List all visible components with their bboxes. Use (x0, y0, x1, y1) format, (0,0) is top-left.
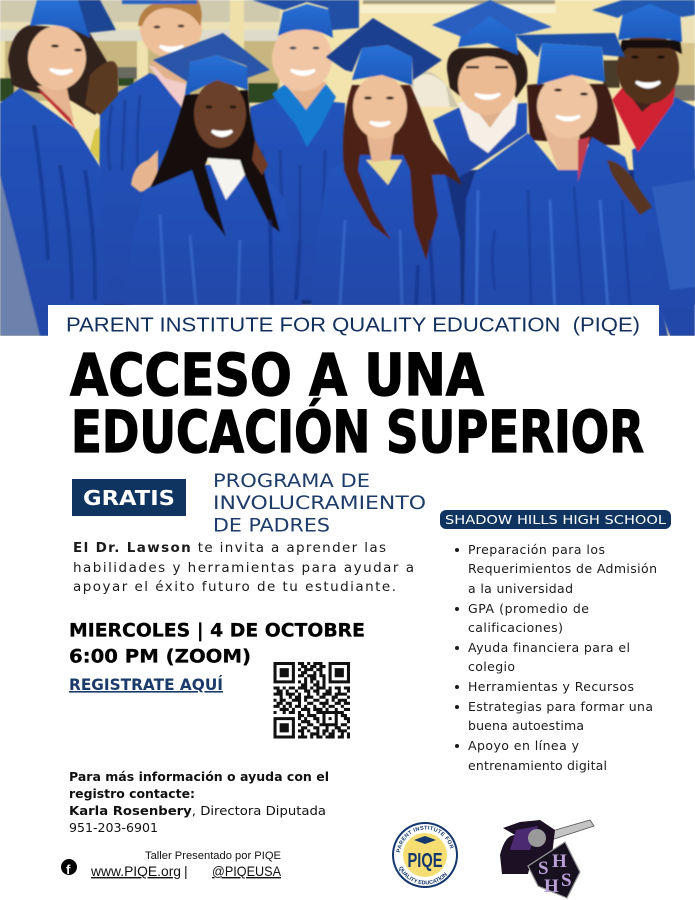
subtitle: programa: INVOLUCRAMIENTO (213, 492, 426, 514)
website and social handle (90, 863, 282, 879)
logo: PIQE: PIQE (408, 850, 442, 872)
workshop topics list: calificaciones) (468, 620, 563, 635)
front: girl with black hair (124, 33, 302, 305)
workshop topics list: entrenamiento digital (468, 758, 607, 773)
logo: PIQE: QUALITY EDUCATION (399, 866, 448, 884)
photo: graduating students in blue gowns (0, 0, 695, 336)
logo: Shadow Hills knight: S (561, 870, 572, 891)
website and social handle: | (184, 863, 188, 879)
contact information: Karla Rosenbery , Directora Diputada (69, 803, 326, 818)
logo: Shadow Hills knight: H (552, 851, 567, 872)
workshop topics list: a la universidad (468, 581, 573, 596)
registration link: REGISTRATE AQUÍ (69, 675, 223, 694)
back row: boy with pink shirt (98, 0, 202, 305)
badge: gratis: GRATIS (83, 486, 175, 510)
banner: organisation name: PARENT INSTITUTE FOR QUALITY EDUCATION (PIQE) (66, 314, 640, 336)
building backdrop (0, 0, 695, 336)
logo: PIQE: PARENT INSTITUTE FOR (396, 826, 454, 852)
title: ACCESO A UNA (70, 341, 484, 409)
invitation paragraph: El Dr. Lawson te invita a aprender las (73, 540, 386, 556)
contact information (69, 769, 329, 835)
contact information: registro contacte: (69, 786, 195, 801)
banner: organisation name (48, 305, 659, 336)
workshop topics list: Apoyo en línea y (468, 738, 580, 753)
workshop topics list: Preparación para los (468, 542, 605, 557)
back row: boy with white shirt (432, 0, 552, 180)
invitation paragraph: apoyar el éxito futuro de tu estudiante. (73, 579, 396, 595)
logo: Shadow Hills knight: S (538, 858, 549, 879)
logo: Shadow Hills knight: H (544, 876, 559, 897)
front: girl with brown hair (311, 18, 462, 305)
contact information: 951-203-6901 (69, 820, 158, 835)
workshop topics list: GPA (promedio de (468, 601, 589, 616)
title (70, 341, 644, 466)
gown mass behind figures (95, 170, 695, 305)
workshop topics list: colegio (468, 659, 515, 674)
date and time (69, 620, 365, 668)
front: woman on the left (0, 0, 118, 336)
date and time: 6:00 PM (ZOOM) (69, 646, 251, 668)
badge: gratis (72, 479, 186, 516)
QR code (274, 664, 350, 737)
arm on shoulder (131, 150, 158, 192)
workshop topics list (455, 542, 657, 773)
presenter credit: Taller Presentado por PIQE (145, 850, 281, 862)
workshop topics list: buena autoestima (468, 718, 584, 733)
subtitle: programa (213, 470, 426, 536)
workshop topics list: Herramientas y Recursos (468, 679, 634, 694)
logo: Shadow Hills knight (500, 820, 594, 898)
workshop topics list: Estrategias para formar una (468, 699, 653, 714)
website and social handle: @PIQEUSA (212, 863, 282, 879)
back row: boy with blue polo (248, 0, 359, 300)
icon: facebook: f (66, 862, 71, 877)
logo: PIQE (392, 822, 458, 888)
invitation paragraph (73, 540, 414, 595)
school name pill (440, 510, 671, 529)
subtitle: programa: DE PADRES (213, 514, 330, 536)
school name pill: SHADOW HILLS HIGH SCHOOL (445, 512, 666, 527)
subtitle: programa: PROGRAMA DE (213, 470, 370, 492)
contact information: Para más información o ayuda con el (69, 769, 329, 784)
date and time: MIERCOLES | 4 DE OCTOBRE (69, 620, 365, 642)
back row: boy with red polo (592, 0, 695, 336)
website and social handle: www.PIQE.org (90, 863, 181, 879)
front: girl on the right (463, 33, 668, 336)
invitation paragraph: habilidades y herramientas para ayudar a (73, 560, 414, 576)
icon: facebook (61, 859, 77, 877)
workshop topics list: Requerimientos de Admisión (468, 561, 657, 576)
workshop topics list: Ayuda financiera para el (468, 640, 630, 655)
